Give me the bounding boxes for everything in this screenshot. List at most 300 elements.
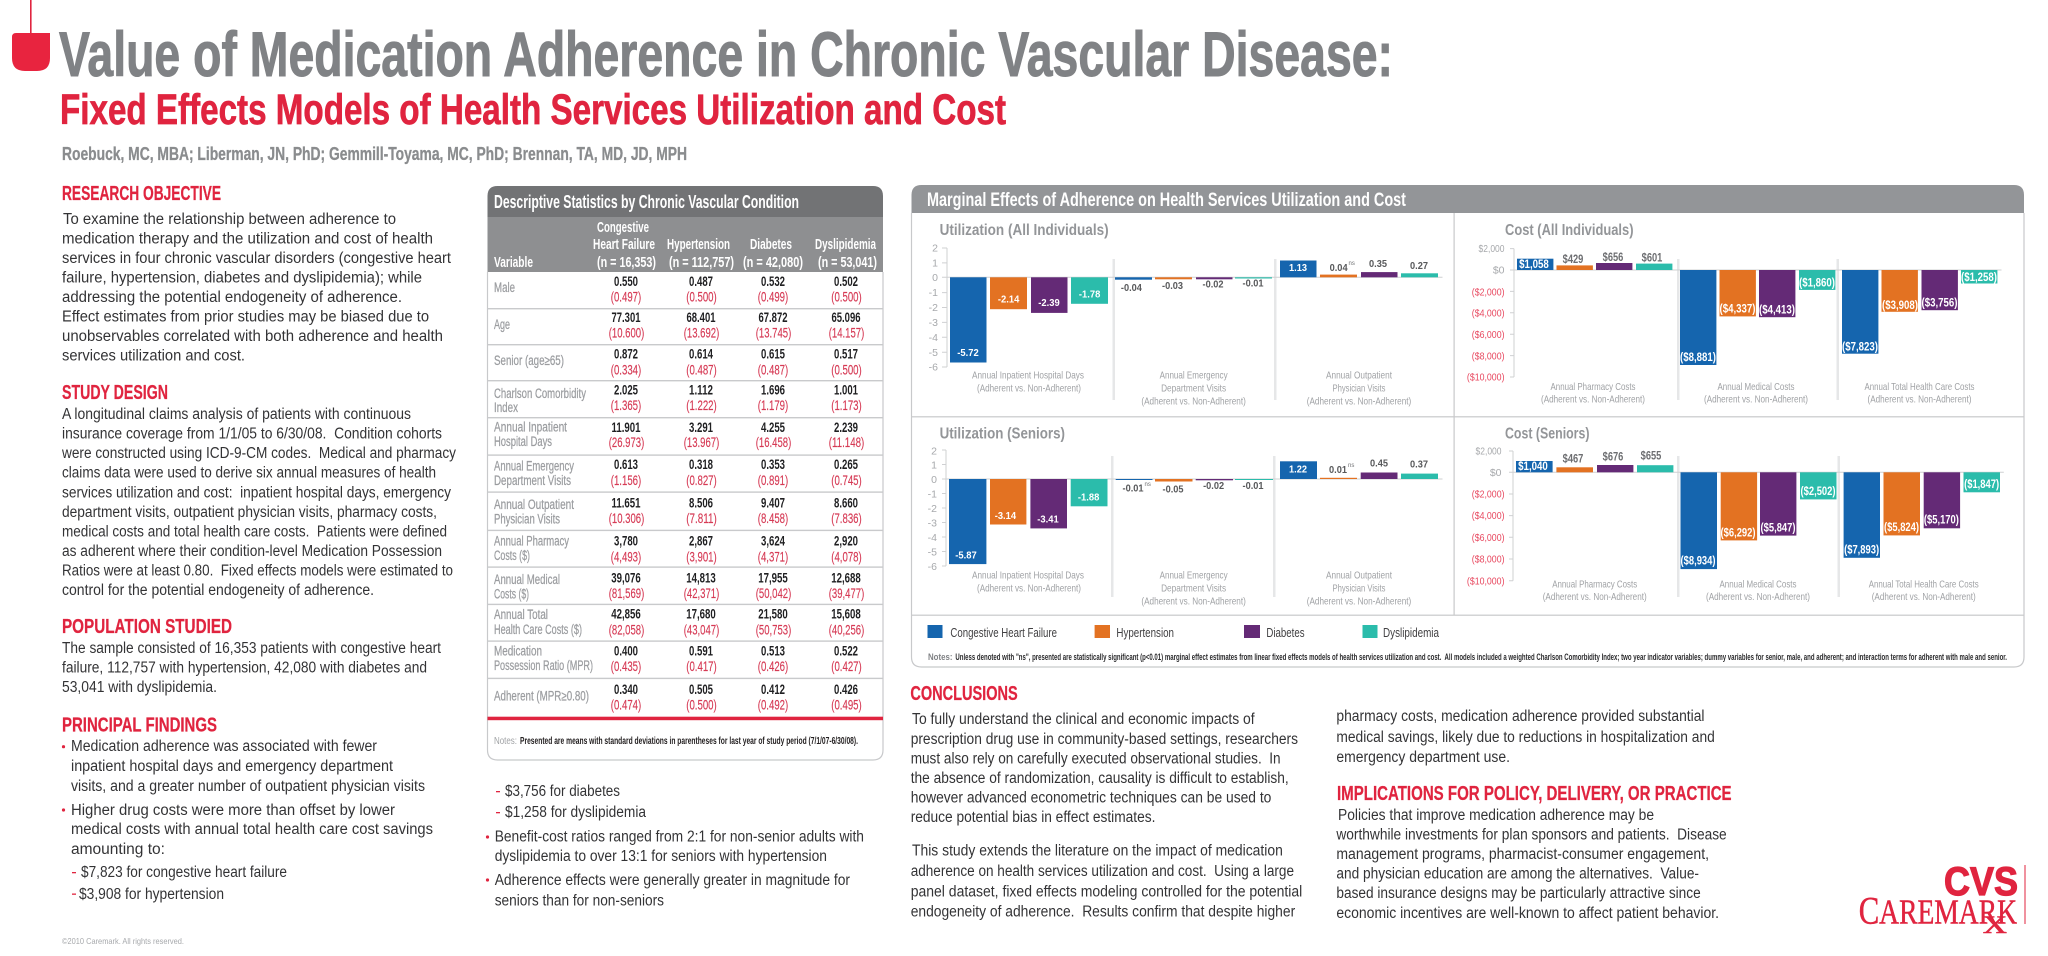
row: mpr: 0.591: [689, 643, 713, 658]
row: senior: (0.334): [611, 362, 641, 377]
chart: utilization seniors: -0.01: [1242, 480, 1264, 492]
text block: implications body: worthwhile investments for plan sponsors and patients. Disease: [1336, 826, 1727, 843]
chart: cost seniors: ($7,893): [1844, 544, 1879, 556]
icon: red pill marker with line: [12, 0, 50, 71]
chart: cost seniors: ($4,000): [1472, 510, 1504, 522]
row: mpr: (0.435): [611, 659, 641, 674]
chart: cost all individuals: ($3,908): [1882, 300, 1918, 312]
legend: [928, 625, 1439, 640]
row: medical costs: (42,371): [684, 586, 719, 601]
text block: research objective body: [62, 211, 452, 365]
table header row: (n = 16,353): [597, 254, 656, 271]
text block: population body: 53,041 with dyslipidemia.: [62, 679, 217, 696]
chart: cost seniors: $676: [1603, 451, 1623, 463]
row: inpatient days: 2.239: [834, 420, 858, 435]
chart: cost all individuals: ($3,756): [1922, 298, 1958, 310]
text block: conclusions body: This study extends the literature on the impact of medication: [912, 843, 1283, 860]
chart: utilization seniors: [928, 426, 1442, 607]
row: total costs: 15,608: [831, 607, 861, 622]
table header row: (n = 112,757): [669, 254, 734, 271]
row: medical costs: 12,688: [831, 570, 861, 585]
text block: conclusions body: endogeneity of adherence. Results confirm that despite higher: [911, 904, 1295, 921]
row: inpatient days: 11.901: [612, 420, 641, 435]
chart: cost all individuals: ($8,881): [1680, 352, 1716, 364]
row: mpr: 0.522: [834, 643, 858, 658]
chart: utilization all individuals: 0.04: [1330, 262, 1348, 274]
chart: utilization seniors: ns: [1348, 463, 1354, 469]
chart: utilization all individuals: -4: [929, 332, 938, 344]
row: mpr: (0.417): [686, 659, 717, 674]
text block: conclusions body: prescription drug use in community-based settings, researchers: [911, 731, 1298, 748]
chart: utilization seniors: Department Visits: [1161, 583, 1226, 595]
chart: utilization all individuals: -5: [929, 347, 938, 359]
row: charlson: 1.112: [689, 383, 713, 398]
chart: utilization all individuals: 1.13: [1289, 262, 1307, 274]
row: senior: [494, 347, 862, 377]
row: mpr: (0.426): [758, 659, 788, 674]
panel: research objective: [62, 183, 452, 365]
heading: implications: IMPLICATIONS FOR POLICY, DELIVERY, OR PRACTICE: [1337, 783, 1732, 805]
chart: cost seniors: Cost (Seniors): [1505, 426, 1590, 443]
row: senior: (0.500): [831, 362, 862, 377]
chart: cost seniors: $1,040: [1518, 461, 1548, 473]
chart: cost seniors: ($6,000): [1472, 532, 1504, 544]
row: pharmacy costs: (4,371): [758, 549, 788, 564]
row: senior: 0.615: [761, 347, 785, 362]
row: medical costs: 17,955: [758, 570, 788, 585]
row: medical costs: (39,477): [829, 586, 864, 601]
row: mpr: (0.427): [831, 659, 862, 674]
chart: cost all individuals: $2,000: [1478, 243, 1505, 255]
logo: CVS Caremark: [1859, 860, 2026, 941]
copyright: ©2010 Caremark. All rights reserved.: [62, 936, 184, 946]
table notes: Presented are means with standard deviations in parentheses for last year of study period (7/1/07-6/30/08).: [520, 736, 858, 747]
text block: research objective body: To examine the relationship between adherence to: [63, 211, 396, 228]
chart: utilization seniors: -4: [928, 532, 937, 544]
chart: utilization all individuals: 2: [932, 242, 938, 254]
row: pharmacy costs: (4,493): [611, 549, 641, 564]
text block: conclusions body: adherence on health services utilization and cost. Using a large: [911, 863, 1294, 880]
table notes: [494, 736, 858, 747]
chart: utilization all individuals: -0.02: [1202, 279, 1224, 291]
text block: research objective body: medication therapy and the utilization and cost of health: [62, 230, 433, 247]
row: inpatient days: (13.967): [684, 435, 719, 450]
row: senior: (0.487): [686, 362, 717, 377]
text block: conclusions body: must also rely on carefully executed observational studies. In: [911, 751, 1281, 768]
row: emergency visits: 0.613: [614, 457, 638, 472]
row: age: (10.600): [609, 326, 644, 341]
row: charlson: 1.001: [834, 383, 858, 398]
row: adherent: Adherent (MPR≥0.80): [494, 689, 589, 704]
panel: conclusions: [910, 683, 1715, 921]
chart: utilization seniors: Annual Emergency: [1160, 570, 1228, 582]
row: total costs: Health Care Costs ($): [494, 622, 582, 637]
chart: utilization seniors: 2: [931, 445, 937, 457]
chart: cost seniors: ($2,000): [1472, 489, 1504, 501]
row: outpatient visits: Physician Visits: [494, 512, 560, 527]
chart: utilization seniors: -2: [928, 503, 937, 515]
chart: utilization seniors: -5.87: [955, 550, 977, 562]
chart: cost all individuals: (Adherent vs. Non-Adherent): [1868, 394, 1972, 406]
chart: cost all individuals: ($4,413): [1759, 304, 1795, 316]
row: outpatient visits: 11.651: [612, 496, 641, 511]
chart: utilization seniors: (Adherent vs. Non-Adherent): [1141, 595, 1246, 607]
table header row: Heart Failure: [593, 236, 655, 253]
panel: descriptive statistics table: [488, 186, 883, 760]
row: senior: 0.872: [614, 347, 638, 362]
text block: study design body: medical costs and total health care costs. Patients were defined: [62, 523, 447, 540]
text block: conclusions body: [911, 711, 1302, 921]
panel: implications: [1336, 783, 1732, 922]
text block: study design body: control for the potential endogeneity of adherence.: [62, 582, 374, 599]
text block: findings continued: $3,756 for diabetes: [505, 783, 620, 800]
row: emergency visits: 0.265: [834, 457, 858, 472]
chart: cost seniors: ($5,170): [1924, 515, 1959, 527]
chart: utilization all individuals: Annual Inpatient Hospital Days: [972, 370, 1084, 382]
text block: conclusions body: the absence of randomization, causality is difficult to establish,: [911, 770, 1289, 787]
row: senior: 0.614: [689, 347, 713, 362]
chart: utilization all individuals: Annual Emergency: [1160, 370, 1228, 382]
table header row: (n = 42,080): [743, 254, 803, 271]
chart: cost seniors: (Adherent vs. Non-Adherent): [1543, 591, 1647, 603]
chart: cost all individuals: ($1,860): [1799, 278, 1835, 290]
chart notes: Notes:: [928, 652, 952, 663]
row: adherent: [494, 682, 862, 713]
row: senior: Senior (age≥65): [494, 353, 564, 368]
row: medical costs: 39,076: [611, 570, 641, 585]
heading: population studied: POPULATION STUDIED: [62, 616, 232, 638]
chart: utilization seniors: -3.14: [995, 510, 1016, 522]
row: medical costs: Costs ($): [494, 587, 529, 602]
chart: utilization all individuals: Physician Visits: [1332, 383, 1386, 395]
text block: implications body: [1336, 807, 1727, 922]
text block: findings bullets: $3,908 for hypertension: [79, 886, 224, 903]
row: emergency visits: (1.156): [611, 473, 641, 488]
legend: Dyslipidemia: [1383, 626, 1439, 640]
text block: findings bullets: Medication adherence was associated with fewer: [71, 738, 377, 755]
chart: cost all individuals: ($4,337): [1720, 304, 1756, 316]
row: adherent: (0.495): [831, 698, 862, 713]
text block: conclusions continued: medical savings, likely due to reductions in hospitalization and: [1336, 729, 1715, 746]
chart: utilization seniors: Utilization (Seniors): [940, 426, 1065, 443]
table notes: Notes:: [494, 736, 517, 747]
row: age: 65.096: [832, 310, 861, 325]
chart: cost all individuals: $0: [1493, 265, 1505, 277]
row: outpatient visits: 8.506: [689, 496, 713, 511]
chart: utilization seniors: 0: [931, 474, 937, 486]
text block: study design body: claims data were used to derive six annual measures of health: [62, 465, 436, 482]
row: age: 68.401: [686, 310, 716, 325]
text block: implications body: Policies that improve medication adherence may be: [1338, 807, 1654, 824]
chart: utilization seniors: -0.02: [1203, 480, 1224, 492]
row: charlson: [494, 383, 862, 415]
chart: cost seniors: $467: [1563, 453, 1583, 465]
row: adherent: 0.412: [761, 682, 785, 697]
text block: findings continued: seniors than for non-seniors: [495, 893, 664, 910]
table header row: Variable: [494, 254, 533, 271]
row: inpatient days: Annual Inpatient: [494, 420, 567, 435]
text block: study design body: [61, 406, 456, 599]
row: mpr: Medication: [494, 644, 542, 659]
panel: principal findings: [62, 715, 433, 903]
logo: CVS Caremark: CVS: [1944, 860, 2018, 904]
row: male: (0.499): [758, 290, 788, 305]
row: inpatient days: (16.458): [756, 435, 791, 450]
text block: findings bullets: Higher drug costs were more than offset by lower: [71, 802, 395, 819]
table header row: Diabetes: [750, 236, 792, 253]
row: total costs: 21,580: [758, 607, 788, 622]
chart: utilization all individuals: Department Visits: [1161, 383, 1226, 395]
chart: utilization seniors: -6: [928, 561, 937, 573]
row: total costs: Annual Total: [494, 607, 548, 622]
chart: utilization all individuals: [929, 222, 1442, 407]
row: inpatient days: 3.291: [689, 420, 713, 435]
chart: utilization seniors: 0.45: [1370, 458, 1388, 470]
text block: conclusions body: To fully understand the clinical and economic impacts of: [912, 711, 1255, 728]
row: emergency visits: Department Visits: [494, 473, 571, 488]
row: adherent: 0.426: [834, 682, 858, 697]
panel: study design: [61, 382, 456, 599]
row: pharmacy costs: (3,901): [686, 549, 717, 564]
text block: conclusions continued: pharmacy costs, medication adherence provided substantial: [1336, 708, 1704, 725]
row: pharmacy costs: (4,078): [831, 549, 862, 564]
text block: findings bullets: $7,823 for congestive heart failure: [81, 864, 287, 881]
row: male: 0.502: [834, 274, 858, 289]
row: outpatient visits: (7.836): [831, 511, 862, 526]
row: emergency visits: (0.827): [686, 473, 717, 488]
text block: conclusions continued: emergency department use.: [1336, 749, 1510, 766]
row: age: [494, 310, 864, 341]
chart: utilization all individuals: -2.39: [1038, 297, 1060, 309]
row: total costs: 42,856: [611, 607, 641, 622]
chart: cost all individuals: (Adherent vs. Non-Adherent): [1704, 394, 1808, 406]
row: total costs: [494, 607, 864, 637]
row: charlson: (1.179): [758, 398, 788, 413]
chart: utilization seniors: -3.41: [1037, 513, 1059, 525]
text block: research objective body: addressing the potential endogeneity of adherence.: [62, 289, 402, 306]
row: medical costs: [494, 570, 864, 602]
text block: conclusions body: however advanced econometric techniques can be used to: [911, 790, 1271, 807]
chart: utilization all individuals: (Adherent vs. Non-Adherent): [1141, 395, 1246, 407]
chart: utilization all individuals: -2.14: [998, 294, 1019, 306]
chart: cost all individuals: ($7,823): [1842, 341, 1878, 353]
row: inpatient days: 4.255: [761, 420, 785, 435]
text block: findings continued: [486, 783, 864, 910]
legend: Hypertension: [1116, 626, 1174, 640]
chart: utilization seniors: 0.01: [1329, 464, 1347, 476]
chart: utilization all individuals: -2: [929, 302, 938, 314]
chart: cost all individuals: ($1,258): [1961, 272, 1997, 284]
row: inpatient days: Hospital Days: [494, 434, 552, 449]
chart: cost seniors: [1467, 426, 2004, 603]
row: adherent: (0.474): [611, 698, 641, 713]
chart: cost seniors: Annual Total Health Care Costs: [1869, 578, 1979, 590]
chart: utilization seniors: (Adherent vs. Non-Adherent): [977, 583, 1081, 595]
text block: study design body: as adherent where their condition-level Medication Possession: [62, 543, 442, 560]
chart: cost seniors: ($6,292): [1720, 527, 1756, 539]
row: outpatient visits: Annual Outpatient: [494, 497, 574, 512]
row: emergency visits: (0.745): [831, 473, 862, 488]
row: pharmacy costs: 3,624: [761, 534, 785, 549]
row: senior: (0.487): [758, 362, 788, 377]
text block: implications body: economic incentives are well-known to affect patient behavior.: [1336, 905, 1719, 922]
chart: utilization seniors: -0.05: [1162, 483, 1184, 495]
chart: utilization all individuals: -5.72: [957, 347, 979, 359]
chart: utilization seniors: -0.01: [1122, 483, 1144, 495]
row: mpr: 0.400: [614, 643, 638, 658]
text block: research objective body: Effect estimates from prior studies may be biased due to: [62, 309, 429, 326]
row: charlson: 1.696: [761, 383, 785, 398]
text block: findings bullets: medical costs with annual total health care cost savings: [71, 821, 433, 838]
text block: population body: [62, 640, 442, 696]
row: inpatient days: [494, 420, 864, 450]
row: outpatient visits: 8.660: [834, 496, 858, 511]
text block: implications body: and physician education are among the alternatives. Value-: [1336, 866, 1699, 883]
text block: findings continued: Benefit-cost ratios ranged from 2:1 for non-senior adults with: [495, 829, 864, 846]
chart: utilization all individuals: (Adherent vs. Non-Adherent): [1307, 395, 1411, 407]
panel header: [912, 185, 2024, 213]
chart: cost seniors: ($5,824): [1884, 522, 1919, 534]
text block: study design body: A longitudinal claims analysis of patients with continuous: [62, 406, 411, 423]
text block: research objective body: unobservables correlated with both adherence and health: [62, 328, 443, 345]
text block: study design body: Ratios were at least 0.80. Fixed effects models were estimated to: [62, 563, 453, 580]
row: age: Age: [494, 317, 510, 332]
row: pharmacy costs: 2,920: [834, 534, 858, 549]
text block: findings bullets: [62, 738, 433, 903]
row: outpatient visits: (8.458): [758, 511, 788, 526]
chart: cost seniors: $0: [1490, 467, 1502, 479]
text block: findings continued: dyslipidemia to over 13:1 for seniors with hypertension: [495, 848, 827, 865]
chart: utilization all individuals: -0.01: [1242, 278, 1264, 290]
chart: utilization seniors: -1: [928, 488, 937, 500]
row: age: 67.872: [758, 310, 788, 325]
row: emergency visits: 0.353: [761, 457, 785, 472]
row: medical costs: (81,569): [609, 586, 644, 601]
row: adherent: (0.500): [686, 698, 717, 713]
row: pharmacy costs: Annual Pharmacy: [494, 534, 569, 549]
chart: utilization all individuals: -0.04: [1121, 282, 1142, 294]
row: age: (13.745): [756, 326, 791, 341]
text block: findings bullets: inpatient hospital days and emergency department: [71, 758, 394, 775]
row: inpatient days: (26.973): [609, 435, 644, 450]
row: charlson: 2.025: [614, 383, 638, 398]
chart: utilization seniors: Physician Visits: [1332, 583, 1386, 595]
row: age: (14.157): [829, 326, 864, 341]
row: inpatient days: (11.148): [829, 435, 864, 450]
chart: cost seniors: ($10,000): [1467, 575, 1504, 587]
heading: research objective: RESEARCH OBJECTIVE: [62, 183, 221, 205]
chart: cost seniors: (Adherent vs. Non-Adherent): [1706, 591, 1810, 603]
authors: Roebuck, MC, MBA; Liberman, JN, PhD; Gemmill-Toyama, MC, PhD; Brennan, TA, MD, JD, MPH: [62, 144, 687, 164]
row: pharmacy costs: Costs ($): [494, 548, 530, 563]
heading: principal findings: PRINCIPAL FINDINGS: [62, 715, 217, 737]
row: total costs: 17,680: [686, 607, 716, 622]
chart: cost all individuals: Annual Medical Costs: [1718, 381, 1794, 393]
row: age: 77.301: [612, 310, 641, 325]
chart: cost all individuals: Cost (All Individuals): [1505, 222, 1634, 239]
text block: conclusions body: panel dataset, fixed effects modeling controlled for the potential: [911, 883, 1302, 900]
chart: utilization seniors: 1.22: [1289, 464, 1307, 476]
chart: cost all individuals: $1,058: [1519, 259, 1549, 271]
row: charlson: Index: [494, 400, 518, 415]
text block: conclusions continued: [1336, 708, 1715, 766]
panel: population studied: [62, 616, 442, 696]
chart: cost seniors: ($1,847): [1964, 479, 1999, 491]
chart: utilization all individuals: Utilization (All Individuals): [940, 222, 1109, 239]
text block: implications body: management programs, pharmacist-consumer engagement,: [1336, 846, 1709, 863]
chart: utilization seniors: -3: [928, 518, 937, 530]
row: medical costs: Annual Medical: [494, 572, 560, 587]
row: total costs: (43,047): [684, 622, 719, 637]
chart: utilization seniors: -1.88: [1078, 492, 1099, 504]
chart: cost seniors: Annual Pharmacy Costs: [1552, 578, 1637, 590]
text block: research objective body: services in four chronic vascular disorders (congestive heart: [62, 250, 452, 267]
logo: CVS Caremark: x: [1983, 901, 2007, 941]
row: medical costs: (50,042): [756, 586, 791, 601]
legend: Diabetes: [1266, 626, 1305, 640]
chart: cost seniors: ($2,502): [1800, 486, 1836, 498]
chart: utilization all individuals: ns: [1348, 261, 1355, 267]
chart: cost seniors: $2,000: [1476, 446, 1502, 458]
row: male: (0.497): [611, 290, 641, 305]
text block: research objective body: failure, hypertension, diabetes and dyslipidemia); while: [62, 269, 422, 286]
chart: cost all individuals: $601: [1642, 252, 1663, 264]
text block: study design body: insurance coverage from 1/1/05 to 6/30/08. Condition cohorts: [62, 425, 442, 442]
row: senior: 0.517: [834, 347, 858, 362]
panel: marginal effects charts: [912, 185, 2024, 667]
chart: utilization all individuals: 0.35: [1369, 258, 1387, 270]
chart: cost all individuals: ($4,000): [1472, 308, 1504, 320]
chart: utilization seniors: Annual Inpatient Hospital Days: [972, 570, 1084, 582]
chart: utilization seniors: ns: [1144, 482, 1151, 488]
row: male: 0.550: [614, 274, 638, 289]
text block: findings continued: $1,258 for dyslipidemia: [505, 804, 646, 821]
text block: research objective body: services utilization and cost.: [62, 348, 245, 365]
chart: utilization all individuals: 0: [932, 272, 938, 284]
chart: utilization seniors: (Adherent vs. Non-Adherent): [1307, 595, 1411, 607]
table header row: Hypertension: [667, 236, 730, 253]
row: male: Male: [494, 280, 515, 295]
row: outpatient visits: [494, 496, 862, 527]
chart: cost seniors: ($5,847): [1760, 523, 1796, 535]
text block: study design body: services utilization and cost: inpatient hospital days, emergency: [62, 484, 451, 501]
text block: findings continued: Adherence effects were generally greater in magnitude for: [495, 872, 850, 889]
subtitle: Fixed Effects Models of Health Services Utilization and Cost: [60, 86, 1006, 134]
row: pharmacy costs: [494, 534, 862, 564]
chart: cost all individuals: (Adherent vs. Non-Adherent): [1541, 394, 1645, 406]
row: total costs: (50,753): [756, 622, 791, 637]
row: pharmacy costs: 3,780: [614, 534, 638, 549]
table header row: (n = 53,041): [818, 254, 877, 271]
text block: population body: The sample consisted of 16,353 patients with congestive heart: [62, 640, 442, 657]
row: male: 0.487: [689, 274, 713, 289]
chart: utilization all individuals: 0.27: [1410, 260, 1428, 272]
row: male: (0.500): [831, 290, 862, 305]
chart: cost all individuals: [1467, 222, 2002, 406]
row: medical costs: 14,813: [686, 570, 716, 585]
table header row: Congestive: [597, 219, 649, 236]
row: total costs: (82,058): [609, 622, 644, 637]
row: mpr: Possession Ratio (MPR): [494, 658, 593, 673]
chart: utilization all individuals: -3: [929, 317, 938, 329]
row: outpatient visits: 9.407: [761, 496, 785, 511]
row: adherent: 0.340: [614, 682, 638, 697]
row: outpatient visits: (10.306): [609, 511, 644, 526]
row: adherent: (0.492): [758, 698, 788, 713]
panel header: Marginal Effects of Adherence on Health Services Utilization and Cost: [927, 190, 1407, 211]
table header row: [488, 217, 883, 272]
text block: population body: failure, 112,757 with hypertension, 42,080 with diabetes and: [62, 660, 427, 677]
